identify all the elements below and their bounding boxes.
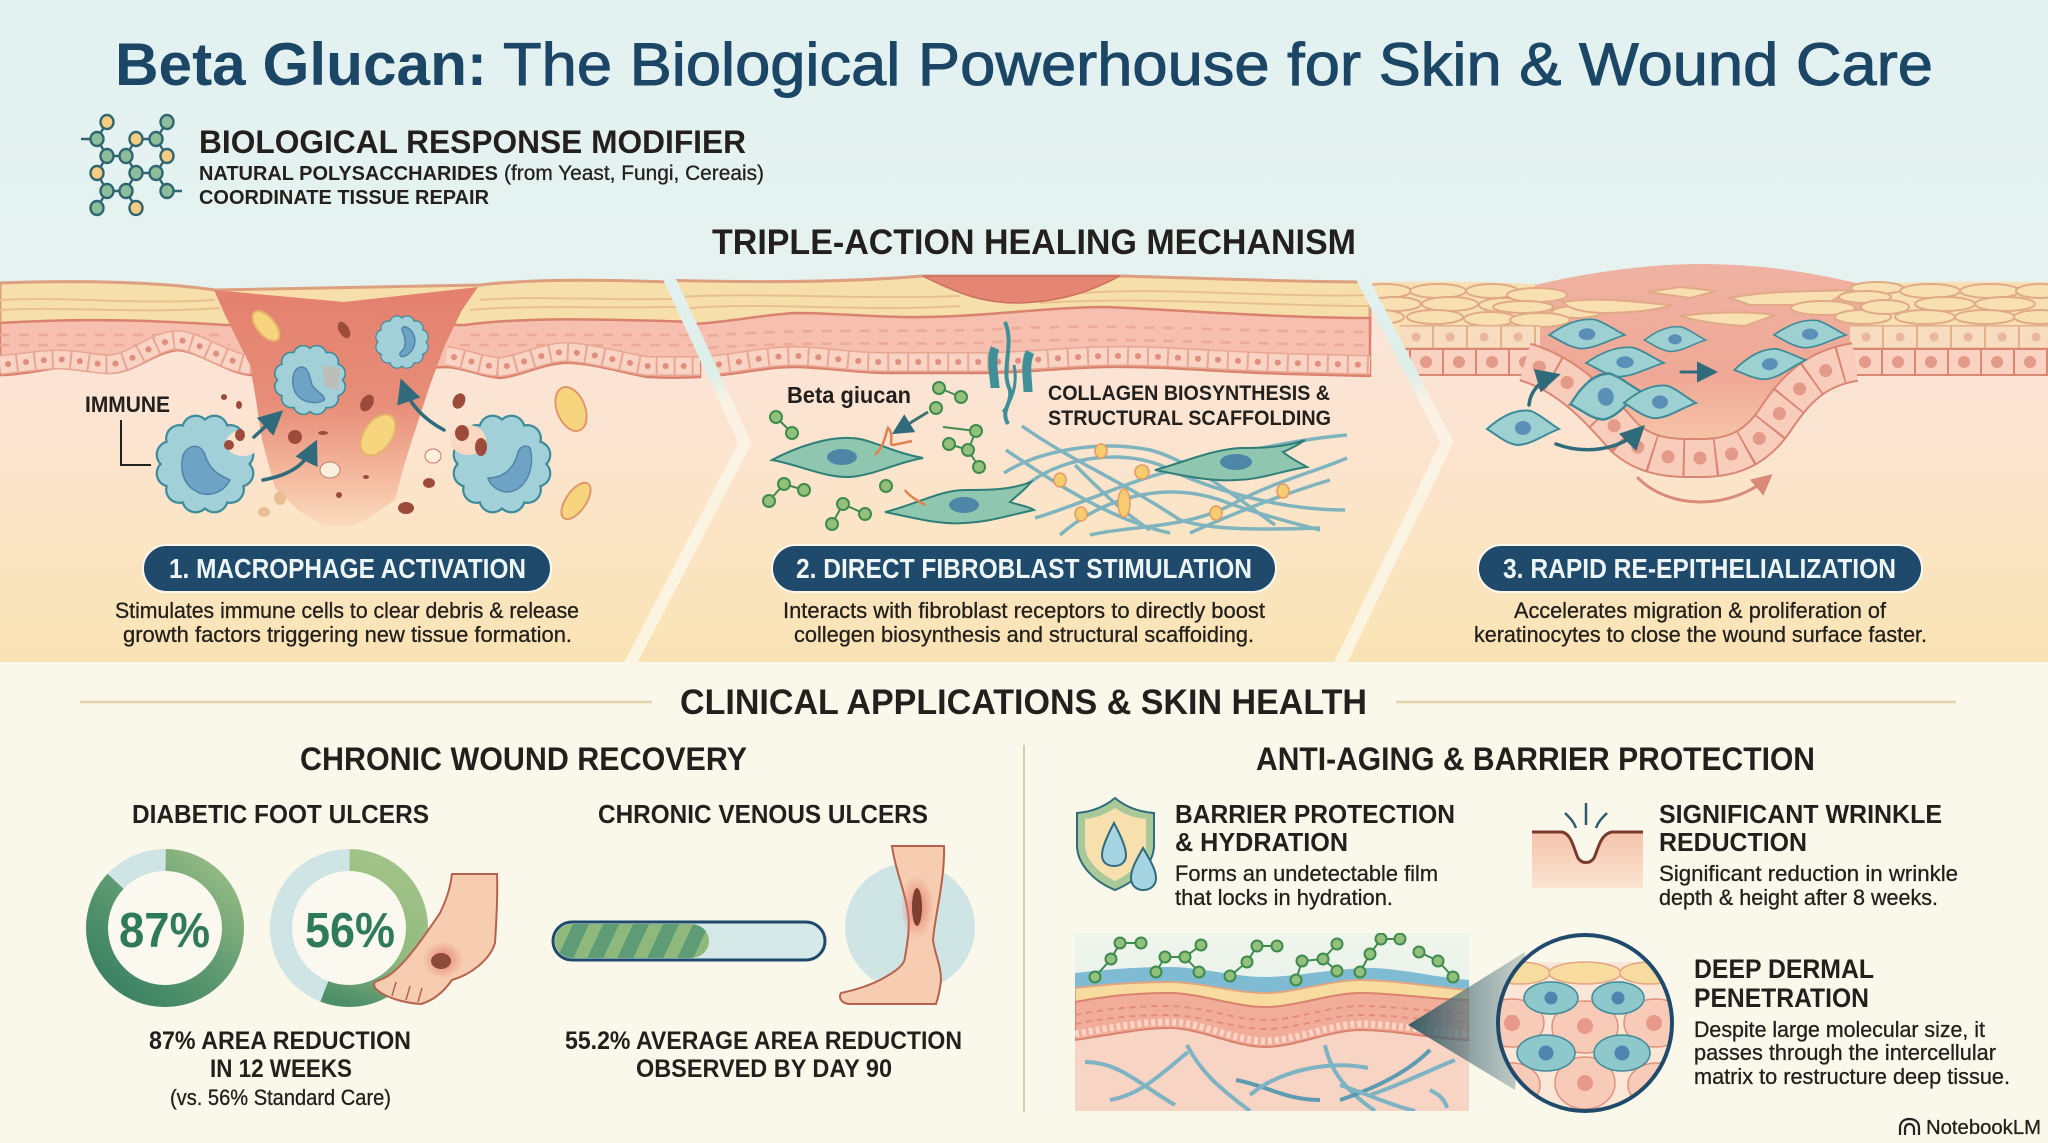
donut chart: 87%: 87% bbox=[119, 904, 210, 958]
arrow: binding bbox=[897, 412, 928, 431]
text: deep dermal penetration: Despite large molecular size, it bbox=[1694, 1017, 1985, 1042]
lower section background bbox=[0, 655, 2048, 1143]
macrophage: right bbox=[450, 416, 550, 512]
intro text block: COORDINATE TISSUE REPAIR bbox=[199, 187, 490, 209]
text: wrinkle reduction: Significant reduction in wrinkle bbox=[1659, 861, 1958, 886]
illustration: skin cross-section bbox=[1075, 933, 1469, 1111]
text: 55.2% area reduction: OBSERVED BY DAY 90 bbox=[636, 1055, 892, 1083]
macrophage: centre bbox=[275, 346, 345, 414]
shallow wound bbox=[923, 276, 1120, 303]
donut chart: 56%: 56% bbox=[305, 904, 395, 958]
text: deep dermal penetration: DEEP DERMAL bbox=[1694, 954, 1874, 984]
immune label with leader: IMMUNE bbox=[85, 392, 170, 417]
beta glucan ribbons bbox=[993, 322, 1030, 424]
flattened skin cells bbox=[1356, 282, 2048, 327]
immune label with leader bbox=[85, 392, 170, 465]
description: re-epithelialization: keratinocytes to close the wound surface faster. bbox=[1474, 622, 1927, 647]
intro text block: BIOLOGICAL RESPONSE MODIFIER bbox=[199, 124, 746, 160]
heading: anti-aging: ANTI-AGING & BARRIER PROTECTION bbox=[1256, 741, 1815, 777]
logo: NotebookLM: NotebookLM bbox=[1926, 1117, 2041, 1139]
header background bbox=[0, 0, 2048, 400]
description: macrophage activation: Stimulates immune cells to clear debris & release bbox=[115, 598, 579, 623]
label: collagen biosynthesis bbox=[1048, 386, 1330, 425]
text: wrinkle reduction: REDUCTION bbox=[1659, 827, 1807, 857]
label: chronic venous ulcers: CHRONIC VENOUS ULCERS bbox=[598, 799, 928, 829]
debris and bacteria bbox=[221, 306, 596, 524]
heading: chronic wound recovery: CHRONIC WOUND RECOVERY bbox=[300, 741, 747, 777]
heading: clinical applications: CLINICAL APPLICATIONS & SKIN HEALTH bbox=[680, 683, 1367, 722]
fibroblast cells bbox=[772, 438, 1307, 523]
wound bed bbox=[1534, 264, 1862, 438]
text: 87% area reduction: IN 12 WEEKS bbox=[210, 1055, 352, 1083]
text: deep dermal penetration bbox=[1694, 954, 2010, 1089]
arrows: toward wound bbox=[254, 385, 444, 480]
collagen mesh bbox=[1004, 426, 1347, 535]
icon: shield with drops bbox=[1077, 798, 1156, 890]
description: macrophage activation: growth factors triggering new tissue formation. bbox=[123, 622, 572, 647]
macrophage: left bbox=[157, 416, 260, 512]
description: fibroblast stimulation bbox=[783, 598, 1265, 647]
text: deep dermal penetration: matrix to restructure deep tissue. bbox=[1694, 1064, 2010, 1089]
panel: rapid re-epithelialization bbox=[1340, 264, 2048, 662]
description: macrophage activation bbox=[115, 598, 579, 647]
icon: foot with ulcer bbox=[374, 874, 497, 1004]
text: 87% area reduction: (vs. 56% Standard Care) bbox=[170, 1085, 391, 1110]
text: 87% area reduction: 87% AREA REDUCTION bbox=[149, 1027, 411, 1055]
description: fibroblast stimulation: collegen biosynthesis and structural scaffoiding. bbox=[794, 622, 1254, 647]
pill: macrophage activation: 1. MACROPHAGE ACTIVATION bbox=[169, 553, 526, 584]
text: 87% area reduction bbox=[149, 1027, 411, 1110]
icon: leg with venous ulcer bbox=[840, 846, 975, 1004]
donut chart: 56% bbox=[281, 860, 417, 996]
text: wrinkle reduction bbox=[1659, 799, 1958, 910]
pill: macrophage activation bbox=[143, 545, 551, 592]
title: Beta Glucan: bbox=[115, 31, 487, 98]
progress bar: 55.2% bbox=[553, 922, 825, 960]
text: wrinkle reduction: SIGNIFICANT WRINKLE bbox=[1659, 799, 1942, 829]
text: barrier protection: Forms an undetectable film bbox=[1175, 861, 1438, 886]
text: barrier protection: BARRIER PROTECTION bbox=[1175, 799, 1455, 829]
label: collagen biosynthesis: STRUCTURAL SCAFFOLDING bbox=[1048, 407, 1331, 430]
text: deep dermal penetration: PENETRATION bbox=[1694, 983, 1869, 1013]
pill: re-epithelialization: 3. RAPID RE-EPITHELIALIZATION bbox=[1503, 553, 1896, 584]
intro text block bbox=[199, 124, 764, 209]
intro text block: (from Yeast, Fungi, Cereais) bbox=[504, 162, 764, 185]
pill: re-epithelialization bbox=[1478, 545, 1922, 592]
text: 55.2% area reduction bbox=[565, 1027, 962, 1083]
icon: molecule bbox=[81, 115, 182, 215]
donut chart: 87% bbox=[97, 860, 233, 996]
label: beta giucan: Beta giucan bbox=[787, 382, 911, 408]
arrows: migration bbox=[1529, 372, 1768, 502]
receptors bbox=[875, 428, 925, 505]
description: fibroblast stimulation: Interacts with fibroblast receptors to directly boost bbox=[783, 598, 1265, 623]
intro text block: NATURAL POLYSACCHARIDES bbox=[199, 163, 498, 185]
icon: wrinkle bbox=[1532, 803, 1643, 888]
label: collagen biosynthesis: COLLAGEN BIOSYNTHESIS & bbox=[1048, 382, 1330, 405]
section: anti-aging and barrier protection bbox=[1075, 741, 2010, 1118]
title: The Biological Powerhouse for Skin & Wound Care bbox=[503, 31, 1933, 98]
text: barrier protection: & HYDRATION bbox=[1175, 827, 1348, 857]
molecules on skin surface bbox=[1090, 934, 1458, 986]
collagen fibres bbox=[1085, 1045, 1455, 1111]
molecules: beta glucan bbox=[763, 382, 985, 530]
text: deep dermal penetration: passes through the intercellular bbox=[1694, 1040, 1996, 1065]
text: barrier protection bbox=[1175, 799, 1455, 910]
migrating cells bbox=[1487, 319, 1846, 445]
heading: triple-action: TRIPLE-ACTION HEALING MECHANISM bbox=[712, 223, 1356, 262]
text: wrinkle reduction: depth & height after 8 weeks. bbox=[1659, 885, 1938, 910]
text: barrier protection: that locks in hydration. bbox=[1175, 885, 1393, 910]
magnifier lens bbox=[1496, 933, 1674, 1113]
section: chronic wound recovery bbox=[97, 741, 975, 1110]
pill: fibroblast stimulation: 2. DIRECT FIBROBLAST STIMULATION bbox=[796, 553, 1252, 584]
description: re-epithelialization bbox=[1474, 598, 1927, 647]
description: re-epithelialization: Accelerates migration & proliferation of bbox=[1514, 598, 1887, 623]
text: 55.2% area reduction: 55.2% AVERAGE AREA REDUCTION bbox=[565, 1027, 962, 1055]
macrophage: upper bbox=[376, 316, 428, 368]
keratinocyte rows bbox=[1345, 337, 2048, 458]
wound bbox=[214, 287, 478, 527]
panel: direct fibroblast stimulation bbox=[630, 276, 1460, 662]
magnifier cone bbox=[1408, 952, 1525, 1090]
label: diabetic foot ulcers: DIABETIC FOOT ULCERS bbox=[132, 799, 429, 829]
orange collagen nodes bbox=[1054, 444, 1289, 521]
panel: macrophage activation bbox=[0, 280, 760, 662]
pill: fibroblast stimulation bbox=[772, 545, 1276, 592]
